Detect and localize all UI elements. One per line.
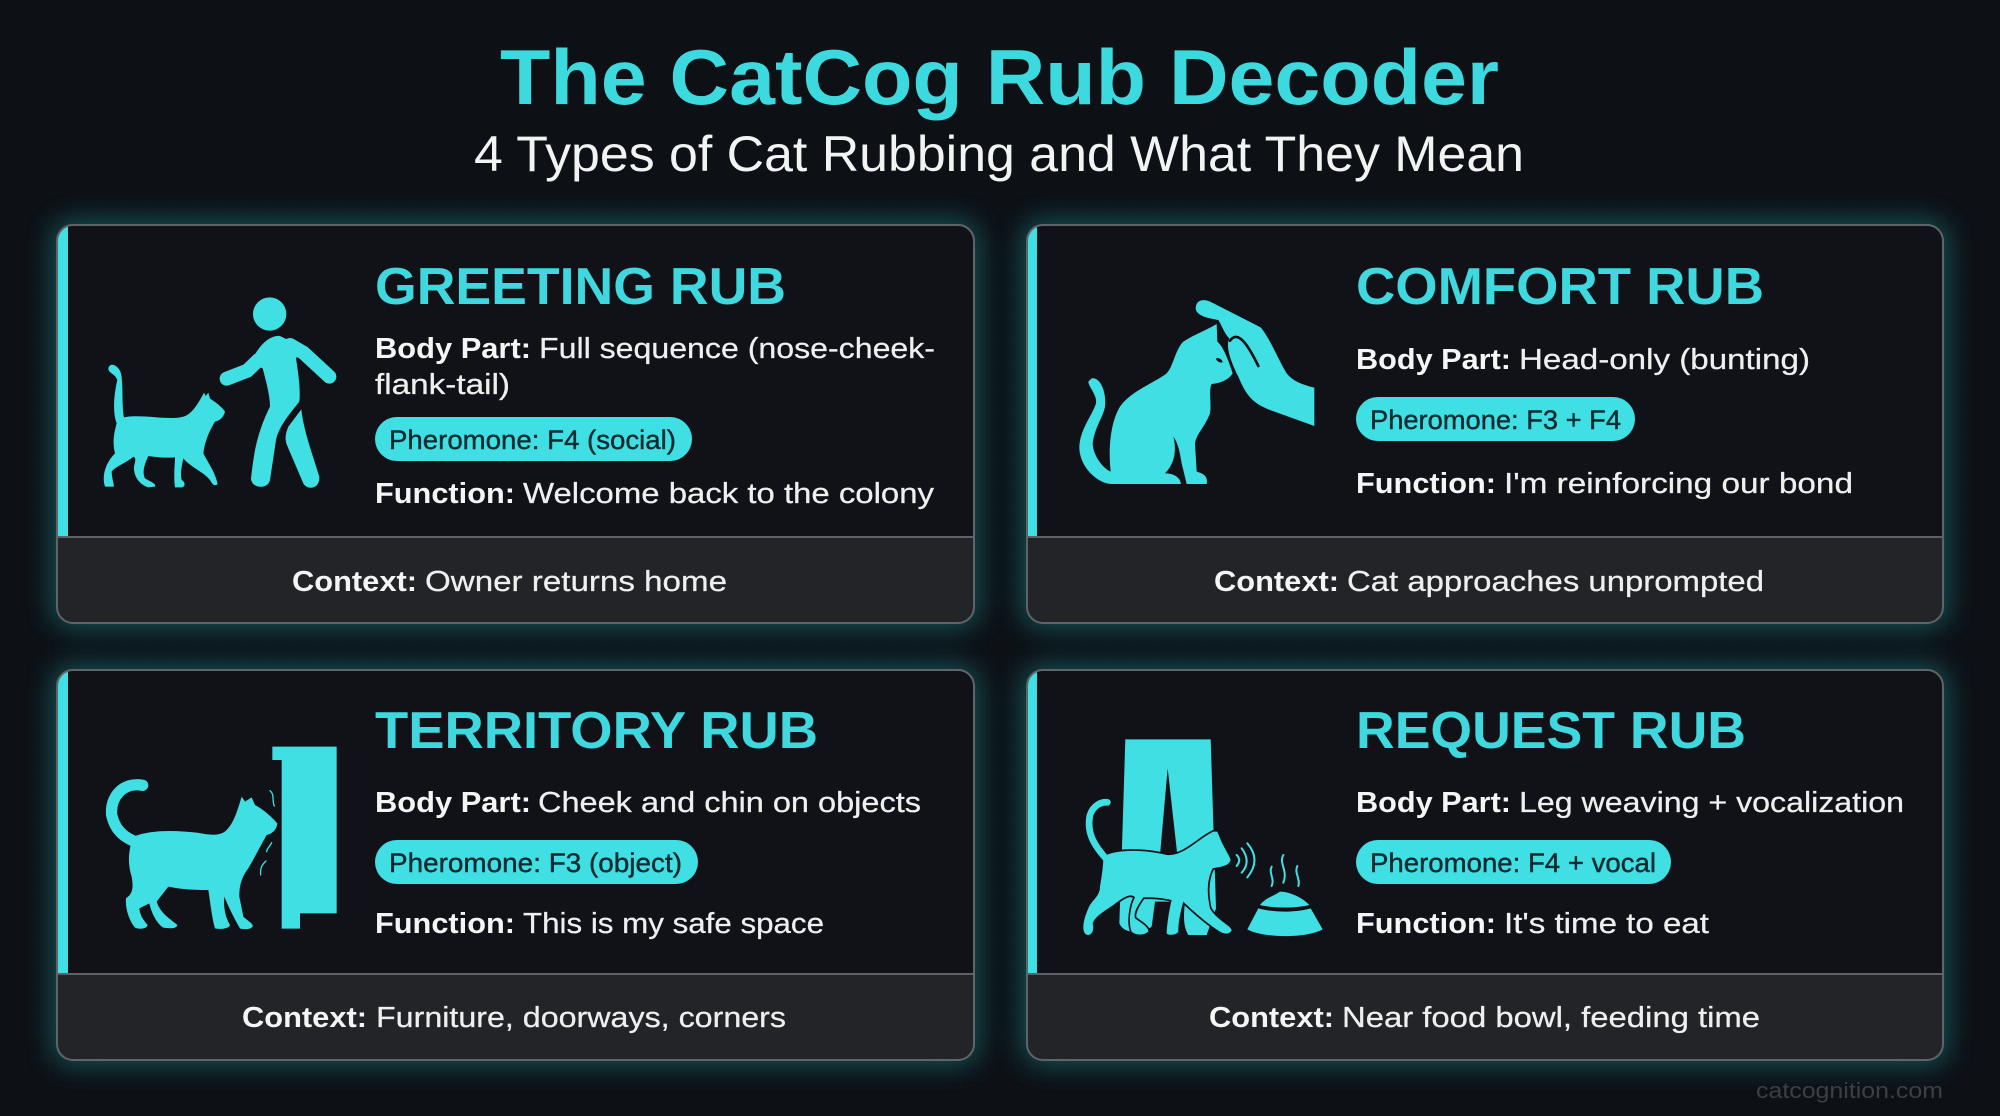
context footer: Owner returns home [425,566,727,598]
panel: greeting rub [53,221,978,627]
icon: cat weaving through legs near food bowl [1083,739,1323,936]
panel: comfort rub [1023,221,1947,627]
context footer: Near food bowl, feeding time [1342,1002,1760,1034]
function text: Function: [1356,468,1496,500]
panel: territory rub [53,666,978,1064]
function text: It's time to eat [1504,908,1709,940]
function text [1356,908,1709,940]
title: The CatCog Rub Decoder [500,33,1499,121]
function text [1356,468,1853,500]
body part text: Body Part: [1356,344,1511,376]
body part text: Body Part: [375,787,531,819]
heading: TERRITORY RUB [375,702,818,760]
context footer [242,1002,786,1034]
body part text: Full sequence (nose-cheek- [539,333,935,365]
body part text: Body Part: [1356,787,1511,819]
body part text [1356,344,1810,376]
function text: Function: [375,908,515,940]
pheromone pill: Pheromone: F4 (social) [389,425,676,455]
pheromone pill [1356,840,1671,884]
heading: COMFORT RUB [1356,258,1764,316]
function text: This is my safe space [523,908,824,940]
pheromone pill: Pheromone: F4 + vocal [1370,848,1656,878]
body part text: Body Part: [375,333,531,365]
body part text [375,333,935,401]
body part text [375,787,921,819]
icon: cat rubbing cheek on furniture [112,747,337,929]
function text [375,908,824,940]
watermark: catcognition.com [1756,1078,1943,1103]
heading: GREETING RUB [375,258,786,316]
context footer: Furniture, doorways, corners [376,1002,786,1034]
heading: REQUEST RUB [1356,702,1746,760]
context footer [1209,1002,1760,1034]
subtitle: 4 Types of Cat Rubbing and What They Mean [474,126,1524,182]
context footer: Cat approaches unprompted [1347,566,1764,598]
context footer: Context: [292,566,417,598]
icon: cat bunting against hand [1079,300,1314,484]
pheromone pill [375,417,692,461]
function text [375,478,935,510]
function text: I'm reinforcing our bond [1504,468,1853,500]
function text: Function: [375,478,515,510]
pheromone pill [375,840,698,884]
function text: Welcome back to the colony [523,478,935,510]
body part text [1356,787,1904,819]
context footer: Context: [242,1002,367,1034]
context footer [292,566,727,598]
panel: request rub [1023,666,1947,1064]
body part text: Cheek and chin on objects [538,787,921,819]
pheromone pill: Pheromone: F3 (object) [389,848,682,878]
body part text: flank-tail) [375,369,510,401]
context footer [1214,566,1764,598]
body part text: Head-only (bunting) [1519,344,1810,376]
pheromone pill [1356,397,1635,441]
function text: Function: [1356,908,1496,940]
context footer: Context: [1214,566,1339,598]
icon: cat greeting walking person [104,297,329,488]
pheromone pill: Pheromone: F3 + F4 [1370,405,1621,435]
context footer: Context: [1209,1002,1334,1034]
body part text: Leg weaving + vocalization [1519,787,1904,819]
